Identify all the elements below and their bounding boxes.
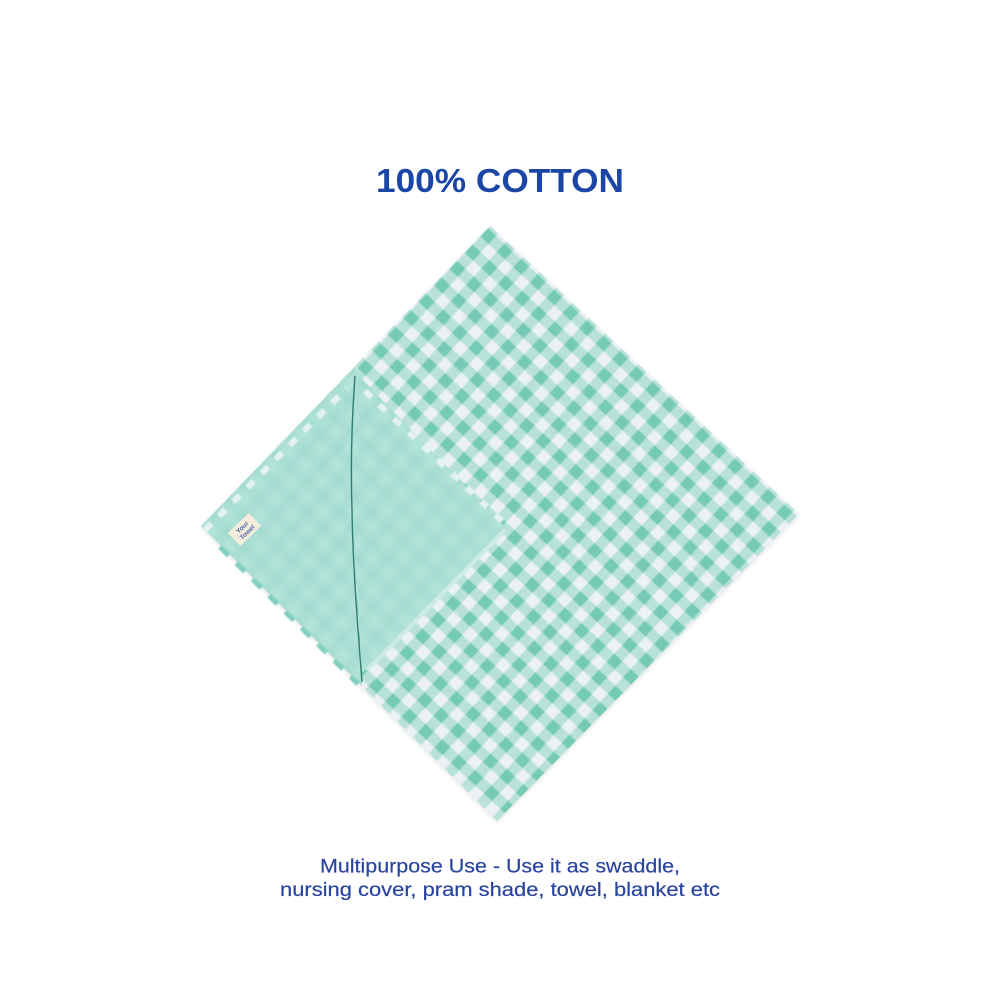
caption (280, 856, 720, 901)
soft cloth shadow (201, 228, 799, 823)
white dashes on upper-left edge (205, 388, 347, 530)
left flap (201, 366, 362, 686)
caption: nursing cover, pram shade, towel, blanket etc (280, 880, 720, 901)
fold crease line (351, 376, 362, 682)
folded gingham cloth (190, 215, 810, 835)
white dashes on flap edge (365, 391, 503, 522)
right flap (352, 374, 506, 673)
title: 100% COTTON (376, 162, 624, 199)
fabric label (228, 513, 261, 546)
fabric label: Your (235, 520, 251, 535)
caption: Multipurpose Use - Use it as swaddle, (320, 856, 680, 878)
flap lower hem (367, 530, 505, 670)
cloth body (190, 215, 810, 835)
fabric label: Towel (239, 524, 257, 541)
dark dashes on lower-left edge (220, 547, 358, 684)
